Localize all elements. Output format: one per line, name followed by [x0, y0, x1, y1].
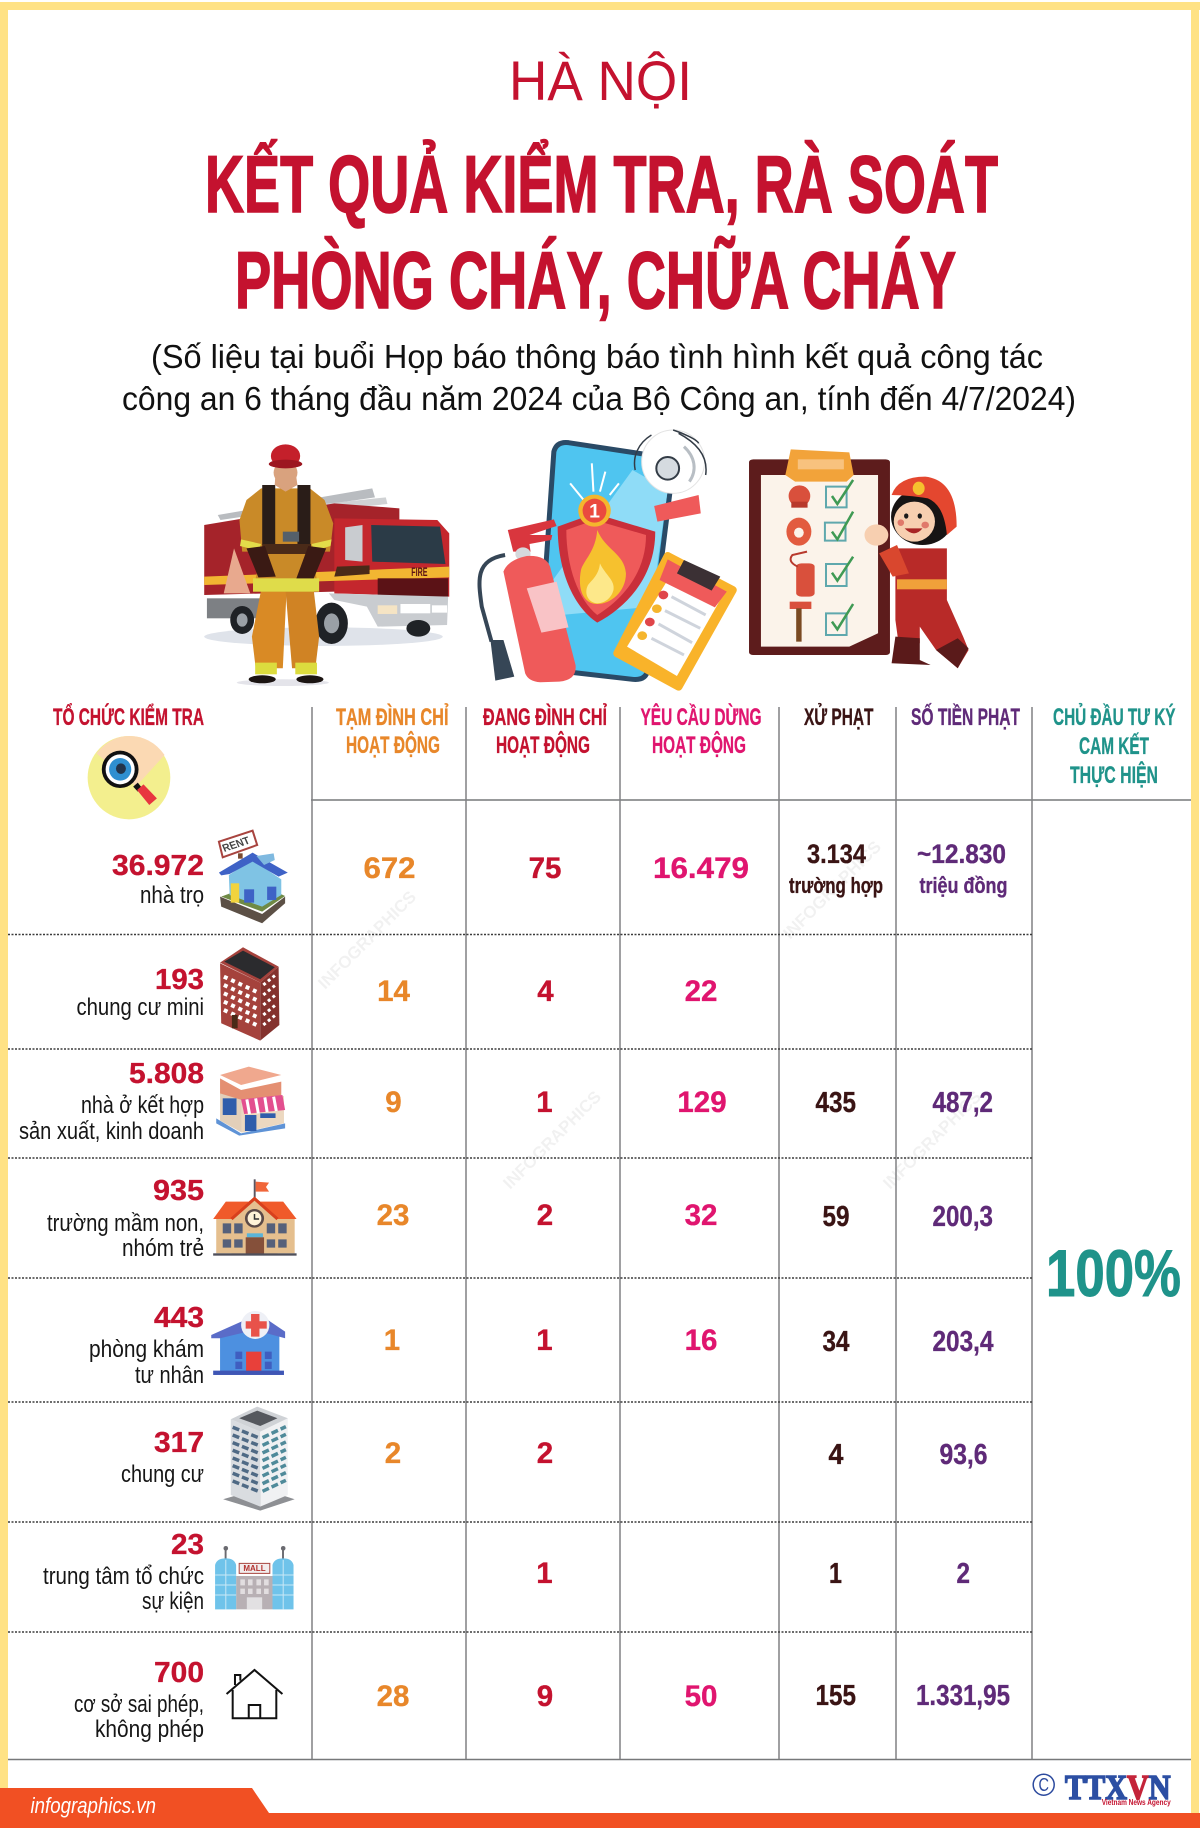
value: 93,6 — [940, 1439, 988, 1471]
icon: mall — [215, 1546, 294, 1609]
value: 1 — [384, 1324, 400, 1357]
label: event centres: sự kiện — [142, 1588, 204, 1615]
label: mini apartments: 193 — [155, 964, 204, 996]
header: investors committed: THỰC HIỆN — [1070, 761, 1158, 789]
watermarks: INFOGRAPHICS — [314, 887, 420, 993]
label: private clinics: tư nhân — [135, 1362, 204, 1389]
icon: tower block — [223, 1407, 295, 1511]
icon: mall: MALL — [243, 1564, 266, 1573]
value: 4 — [537, 975, 554, 1008]
label: kindergartens — [47, 1175, 204, 1262]
header: currently suspended: HOẠT ĐỘNG — [496, 731, 590, 759]
header: currently suspended: ĐANG ĐÌNH CHỈ — [483, 702, 607, 731]
value: 1 — [536, 1086, 553, 1119]
subtitle line 1: (Số liệu tại buổi Họp báo thông báo tình hình kết quả công tác — [151, 338, 1043, 375]
label: event centres: trung tâm tổ chức — [43, 1563, 204, 1590]
row: boarding houses — [112, 831, 1008, 923]
label: mixed-use houses: 5.808 — [129, 1058, 204, 1090]
value with unit: triệu đồng — [920, 873, 1008, 898]
value: 9 — [537, 1680, 553, 1713]
table grid — [8, 707, 1191, 1760]
title block — [122, 49, 1076, 417]
label: mini apartments — [76, 964, 204, 1021]
header: temporarily suspended — [336, 702, 449, 759]
value: 2 — [956, 1558, 970, 1590]
label: mixed-use houses: sản xuất, kinh doanh — [19, 1118, 204, 1145]
illustration: phone with shield and fire alarm — [479, 430, 733, 687]
label: private clinics: phòng khám — [89, 1336, 204, 1363]
logo tagline: Vietnam News Agency — [1102, 1798, 1171, 1807]
icon: magnifier with eye — [88, 736, 170, 819]
value: 1 — [536, 1557, 553, 1590]
agency logo — [1033, 1768, 1171, 1807]
label: event centres: 23 — [171, 1529, 204, 1561]
copyright mark: C — [1038, 1775, 1049, 1795]
value: 2 — [537, 1437, 553, 1470]
header: investors committed — [1053, 702, 1176, 789]
value: 672 — [364, 852, 416, 885]
kid firefighter — [864, 477, 969, 668]
value: 34 — [822, 1326, 850, 1358]
illustrations row — [204, 430, 969, 687]
table header — [53, 702, 1176, 819]
value: 9 — [385, 1086, 402, 1119]
value: 2 — [385, 1437, 401, 1470]
value: 1 — [536, 1324, 553, 1357]
footer site name: infographics.vn — [30, 1793, 156, 1818]
value with unit: 3.134 — [807, 839, 866, 869]
label: mini apartments: chung cư mini — [76, 994, 204, 1021]
label: unlicensed premises: 700 — [154, 1657, 204, 1689]
watermarks: INFOGRAPHICS — [879, 1087, 985, 1193]
header: fine amount: SỐ TIỀN PHẠT — [911, 703, 1020, 731]
label: kindergartens: nhóm trẻ — [122, 1235, 204, 1262]
label: kindergartens: 935 — [153, 1175, 204, 1207]
header: currently suspended — [483, 702, 607, 759]
value: 23 — [377, 1199, 409, 1232]
icon: house for rent — [219, 831, 288, 923]
logo wordmark: TTXVN — [1065, 1768, 1170, 1807]
row: mini apartments — [76, 947, 717, 1041]
value: 129 — [677, 1086, 727, 1119]
row: event centres — [43, 1529, 970, 1615]
row: apartment buildings — [121, 1407, 988, 1511]
value with unit — [917, 839, 1008, 898]
icon: shop — [216, 1067, 285, 1136]
value: 1 — [829, 1558, 842, 1590]
icon: clinic — [211, 1311, 285, 1375]
icon: school — [213, 1179, 297, 1256]
value: 155 — [816, 1680, 856, 1712]
clipboard — [617, 556, 733, 687]
header: temporarily suspended: HOẠT ĐỘNG — [346, 731, 440, 759]
watermarks — [314, 837, 985, 1193]
header: temporarily suspended: TẠM ĐÌNH CHỈ — [336, 702, 449, 731]
value: 75 — [529, 852, 561, 885]
illustration: fire truck: FIRE — [411, 566, 428, 579]
header: requested to stop: HOẠT ĐỘNG — [652, 731, 746, 759]
header: investors committed: CAM KẾT — [1079, 732, 1149, 760]
badge number: 1 — [589, 500, 600, 522]
value: 16 — [685, 1324, 717, 1357]
header: organisations inspected: TỔ CHỨC KIỂM TRA — [53, 703, 204, 731]
value: 203,4 — [932, 1326, 994, 1358]
label: event centres — [43, 1529, 204, 1615]
label: private clinics — [89, 1302, 204, 1389]
icon: mini apartment block — [220, 947, 279, 1041]
value: 32 — [685, 1199, 717, 1232]
check items — [786, 480, 853, 642]
value: 435 — [816, 1087, 856, 1119]
value: 487,2 — [932, 1087, 993, 1119]
value: 200,3 — [932, 1201, 993, 1233]
label: boarding houses — [112, 850, 204, 909]
row: mixed-use houses — [19, 1058, 993, 1145]
label: mixed-use houses — [19, 1058, 204, 1145]
watermarks: INFOGRAPHICS — [779, 837, 885, 943]
watermarks: INFOGRAPHICS — [499, 1087, 605, 1193]
row: kindergartens — [47, 1175, 993, 1262]
label: apartment buildings: chung cư — [121, 1461, 204, 1488]
icon: house outline — [227, 1670, 282, 1718]
label: unlicensed premises — [74, 1657, 204, 1743]
footer band — [0, 1788, 1200, 1828]
label: kindergartens: trường mầm non, — [47, 1210, 204, 1237]
value: 59 — [822, 1201, 850, 1233]
value: 28 — [377, 1680, 409, 1713]
value: 16.479 — [653, 852, 749, 885]
subtitle line 2: công an 6 tháng đầu năm 2024 của Bộ Công an, tính đến 4/7/2024) — [122, 380, 1076, 417]
label: unlicensed premises: cơ sở sai phép, — [74, 1691, 204, 1718]
icon: house for rent: RENT — [221, 835, 252, 855]
value with unit: ~12.830 — [917, 839, 1006, 869]
value: 2 — [537, 1199, 553, 1232]
header: requested to stop: YÊU CẦU DỪNG — [640, 703, 762, 731]
row: unlicensed premises — [74, 1657, 1010, 1743]
label: apartment buildings: 317 — [154, 1427, 204, 1459]
value: 14 — [377, 975, 410, 1008]
label: boarding houses: nhà trọ — [140, 882, 204, 909]
value: 4 — [828, 1439, 844, 1471]
value: 22 — [685, 975, 717, 1008]
label: private clinics: 443 — [154, 1302, 204, 1334]
header: penalties: XỬ PHẠT — [804, 702, 874, 731]
fire alarm — [635, 430, 706, 522]
label: mixed-use houses: nhà ở kết hợp — [81, 1092, 204, 1119]
value with unit: trường hợp — [789, 873, 883, 898]
illustration: fire truck — [204, 488, 449, 646]
label: apartment buildings — [121, 1427, 204, 1488]
label: unlicensed premises: không phép — [95, 1716, 204, 1743]
value with unit — [789, 839, 883, 898]
label: boarding houses: 36.972 — [112, 850, 204, 882]
illustration: firefighter — [237, 444, 333, 686]
value: 1.331,95 — [916, 1680, 1010, 1712]
title: location: HÀ NỘI — [509, 49, 692, 112]
shield — [558, 495, 655, 623]
header: requested to stop — [640, 703, 762, 759]
value: 50 — [685, 1680, 717, 1713]
fire extinguisher — [479, 519, 576, 682]
row: private clinics — [89, 1302, 994, 1389]
illustration: checklist board — [749, 449, 969, 668]
